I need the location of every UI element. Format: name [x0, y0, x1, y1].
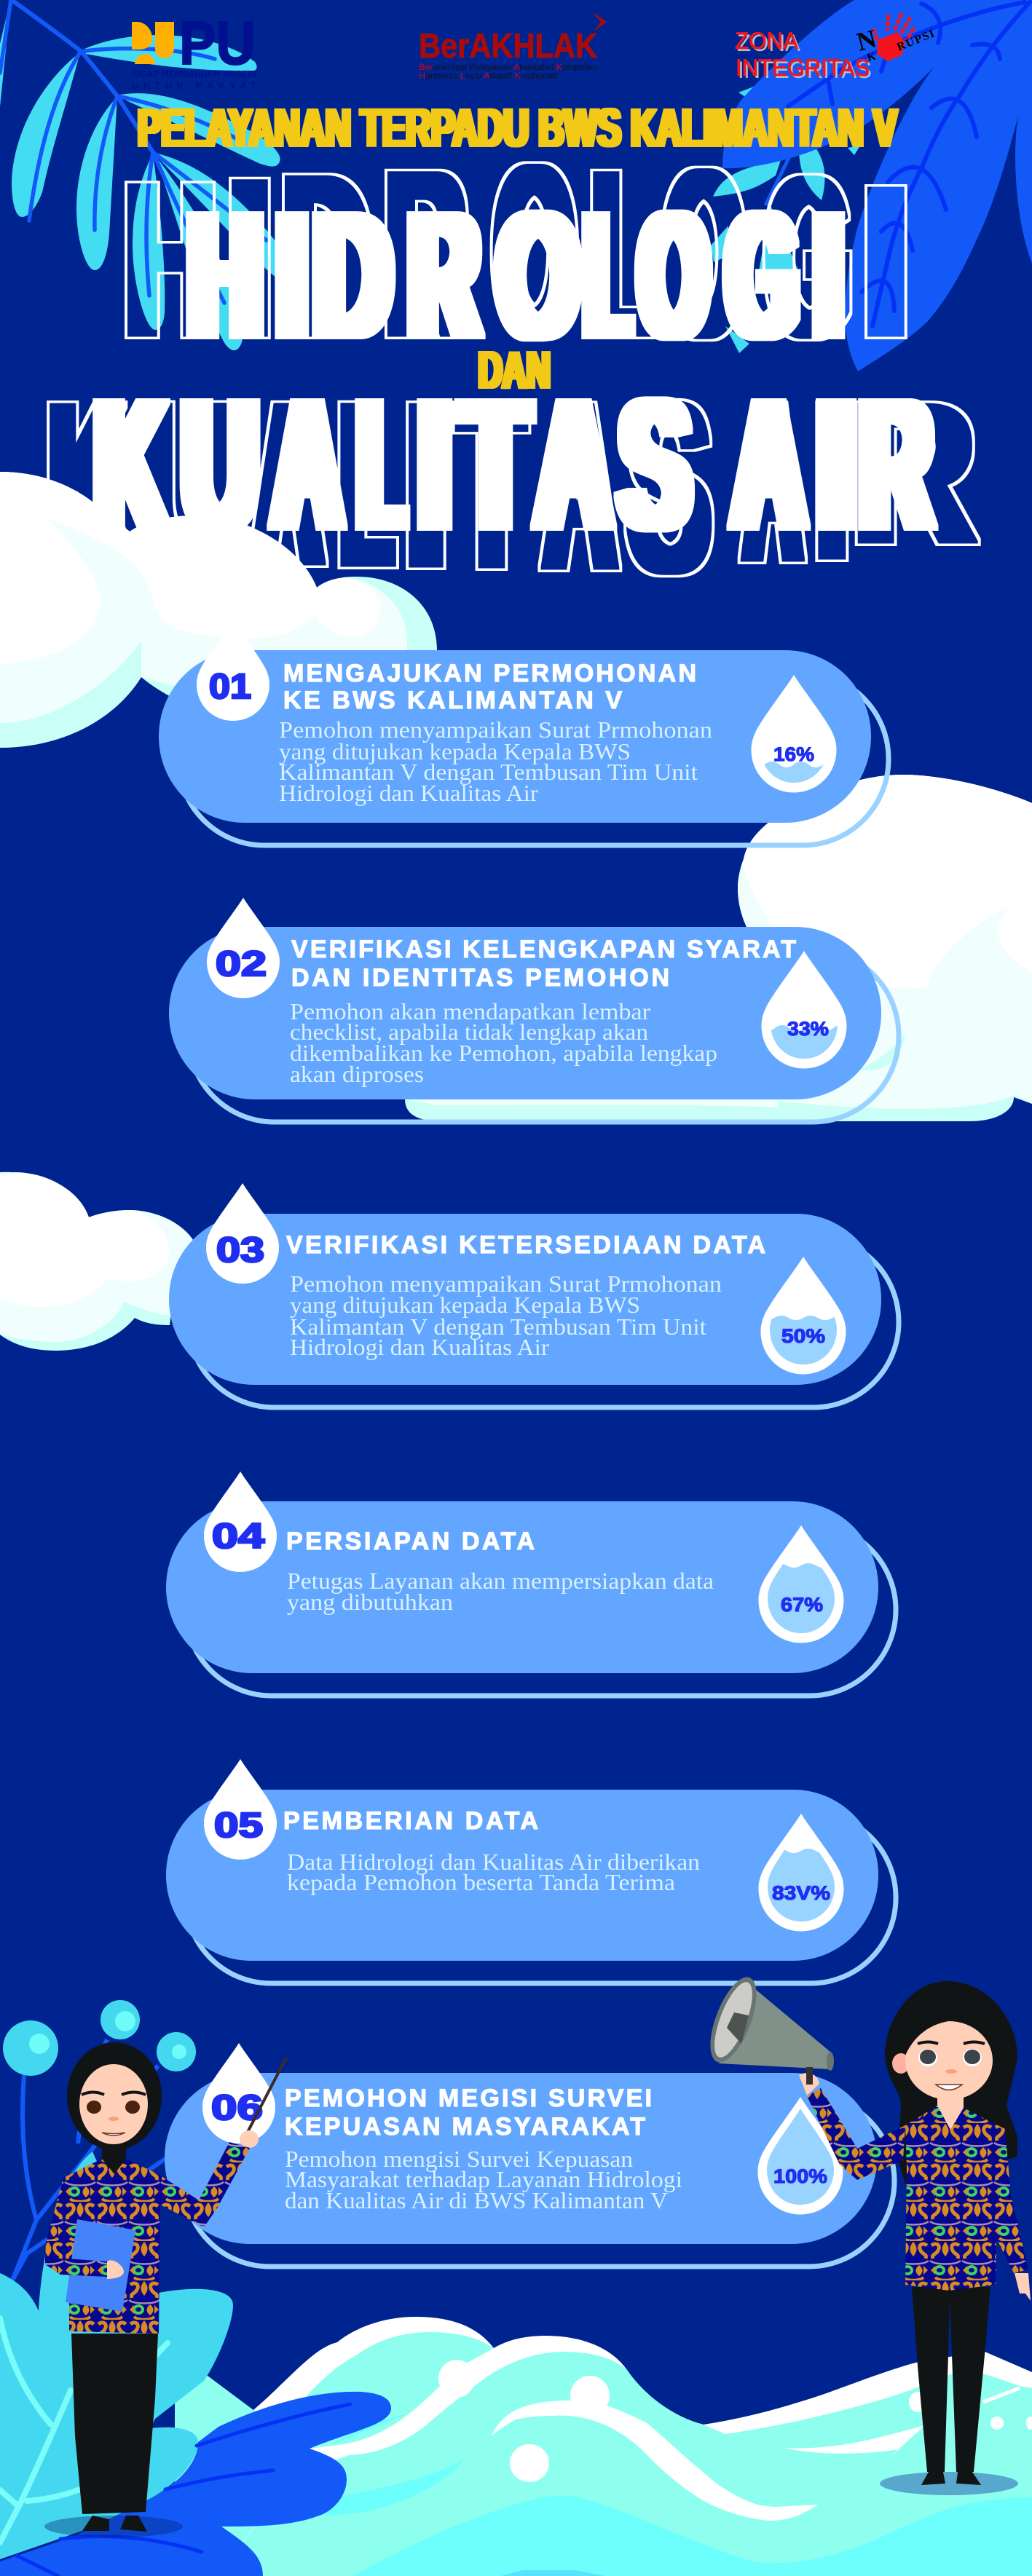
step 5 number drop	[204, 1759, 277, 1860]
title outline: HIDROLOGI	[125, 114, 910, 388]
panel: step 1	[159, 620, 889, 845]
step 1 description: Pemohon menyampaikan Surat Prmohonan	[279, 716, 712, 743]
step 3 number drop: 03	[216, 1231, 264, 1270]
title: KUALITAS AIR: A	[733, 361, 804, 567]
title: HIDROLOGI: I	[814, 176, 843, 375]
step 4 number drop	[204, 1471, 277, 1572]
step 4 description: Petugas Layanan akan mempersiapkan data	[287, 1568, 714, 1594]
title outline: KUALITAS AIR: L	[341, 353, 393, 616]
logo: Zona Integritas: ZONA	[737, 30, 801, 56]
step 1 number drop	[197, 620, 269, 721]
step 2 description: akan diproses	[290, 1061, 424, 1087]
step 4 percentage drop: 67%	[781, 1594, 823, 1616]
step 5 percentage drop	[759, 1814, 843, 1931]
title outline: KUALITAS AIR: A	[544, 353, 616, 620]
title outline: KUALITAS AIR: I	[403, 353, 448, 617]
title outline: HIDROLOGI: G	[767, 129, 851, 384]
step 1 percentage drop	[752, 675, 836, 792]
panel: step 4	[166, 1471, 896, 1696]
title outline: HIDROLOGI: H	[125, 138, 216, 383]
step 3 percentage drop	[760, 1257, 846, 1374]
step 6 heading: PEMOHON MEGISI SURVEI	[285, 2085, 652, 2112]
title: pelayanan terpadu: PELAYANAN TERPADU BWS KALIMANTAN V	[138, 98, 897, 159]
logo: No Korupsi hand: N	[854, 24, 879, 57]
logo: Zona Integritas: INTEGRITAS	[738, 57, 872, 83]
step 2 description: checklist, apabila tidak lengkap akan	[290, 1019, 648, 1045]
step 4 heading: PERSIAPAN DATA	[286, 1528, 535, 1555]
step 2 description	[290, 998, 717, 1087]
step 3 description: Hidrologi dan Kualitas Air	[290, 1334, 549, 1360]
step 1 percentage drop: 16%	[773, 743, 814, 765]
logo: Zona Integritas: ZONA	[735, 28, 799, 54]
cloud: right	[405, 775, 1032, 1121]
logo: PU: PU	[179, 9, 256, 77]
panel: step 6	[165, 2043, 894, 2267]
icon: megaphone	[701, 1972, 834, 2085]
step 2 number drop: 02	[216, 945, 267, 984]
logo: No Korupsi hand	[854, 13, 937, 64]
title: KUALITAS AIR: S	[620, 361, 690, 567]
cloud: middle left	[0, 1172, 193, 1351]
step 2 heading	[291, 936, 796, 992]
title outline: KUALITAS AIR: S	[629, 352, 711, 624]
logo: Zona Integritas: INTEGRITAS	[736, 55, 870, 81]
title outline: KUALITAS AIR: I	[816, 355, 848, 607]
leaves: bottom-left cyan	[0, 2152, 233, 2559]
step 6 percentage drop	[757, 2097, 843, 2214]
step 6 heading: KEPUASAN MASYARAKAT	[285, 2113, 645, 2141]
title outline: KUALITAS AIR: A	[253, 353, 323, 614]
figure: woman with hijab and pointer	[44, 2042, 286, 2537]
step 4 description: yang dibutuhkan	[287, 1589, 453, 1615]
logo: No Korupsi hand: K	[866, 50, 878, 64]
step 2 percentage drop: 33%	[787, 1018, 829, 1040]
step 5 number drop: 05	[214, 1806, 263, 1845]
step 4 description	[287, 1568, 714, 1615]
title: HIDROLOGI: O	[498, 176, 578, 375]
step 6 number drop	[202, 2043, 275, 2144]
leaves: bottom-left blue	[0, 2392, 391, 2576]
title outline: HIDROLOGI: I	[226, 132, 273, 384]
title: HIDROLOGI: G	[728, 175, 797, 374]
title: HIDROLOGI	[189, 175, 843, 375]
leaves: top-left branch	[0, 0, 285, 350]
leaves: top-right	[711, 0, 1032, 371]
step 6 description: Pemohon mengisi Survei Kepuasan	[285, 2146, 633, 2172]
logo: BerAKHLAK	[419, 12, 607, 81]
title outline: HIDROLOGI: R	[386, 120, 466, 386]
logo: BerAKHLAK: Berorientasi Pelayanan Akuntabel Kompeten	[419, 62, 597, 72]
title: KUALITAS AIR: A	[274, 363, 341, 567]
title outline: HIDROLOGI: I	[862, 142, 910, 382]
title: HIDROLOGI: H	[189, 176, 261, 375]
title: HIDROLOGI: R	[409, 176, 478, 374]
title outline: KUALITAS AIR: A	[744, 356, 801, 609]
step 6 number drop: 06	[211, 2089, 263, 2127]
title outline: KUALITAS AIR: K	[49, 362, 122, 585]
figure: woman with megaphone	[701, 1972, 1031, 2495]
step 2 heading: DAN IDENTITAS PEMOHON	[291, 964, 669, 992]
logo: Zona Integritas	[735, 28, 872, 83]
logo: PU: UNTUK RAKYAT	[132, 80, 256, 91]
cloud: top left	[0, 472, 437, 748]
step 6 description: Masyarakat terhadap Layanan Hidrologi	[285, 2166, 682, 2192]
title: KUALITAS AIR	[96, 361, 931, 568]
step 2 description: Pemohon akan mendapatkan lembar	[290, 998, 650, 1024]
title: KUALITAS AIR: R	[861, 361, 931, 567]
title outline: HIDROLOGI: O	[495, 114, 575, 388]
title: KUALITAS AIR: I	[815, 363, 857, 567]
logo: No Korupsi hand: RUPSI	[895, 28, 937, 54]
title outline: HIDROLOGI: D	[283, 126, 370, 385]
step 2 description: dikembalikan ke Pemohon, apabila lengkap	[290, 1040, 717, 1066]
step 1 heading: MENGAJUKAN PERMOHONAN	[283, 660, 696, 687]
step 3 heading: VERIFIKASI KETERSEDIAAN DATA	[286, 1231, 765, 1259]
logo: PU: SIGAP MEMBANGUN NEGERI	[132, 68, 256, 79]
step 3 percentage drop: 50%	[781, 1325, 825, 1347]
panel: step 5	[166, 1759, 896, 1983]
step 5 description	[287, 1849, 700, 1895]
step 1 heading	[283, 660, 696, 714]
plant stems with circles: bottom left	[3, 2000, 196, 2280]
title: KUALITAS AIR: K	[96, 361, 164, 567]
step 5 percentage drop: 83V%	[772, 1882, 830, 1904]
step 1 description	[279, 716, 712, 806]
step 4 number drop: 04	[212, 1517, 264, 1556]
step 3 description: yang ditujukan kepada Kepala BWS	[290, 1292, 640, 1318]
title: DAN: DAN	[478, 340, 551, 400]
title: KUALITAS AIR: L	[360, 361, 403, 567]
title: KUALITAS AIR: T	[462, 362, 529, 568]
title: KUALITAS AIR: I	[419, 361, 451, 567]
step 5 heading: PEMBERIAN DATA	[283, 1807, 538, 1835]
step 1 description: yang ditujukan kepada Kepala BWS	[279, 738, 631, 764]
step 1 number drop: 01	[209, 668, 251, 706]
step 4 percentage drop	[759, 1525, 843, 1643]
step 6 description: dan Kualitas Air di BWS Kalimantan V	[285, 2187, 668, 2213]
step 3 description: Pemohon menyampaikan Surat Prmohonan	[290, 1271, 722, 1297]
logo: BerAKHLAK: BerAKHLAK	[419, 26, 597, 65]
title: HIDROLOGI: I	[277, 175, 307, 374]
step 5 description: Data Hidrologi dan Kualitas Air diberikan	[287, 1849, 700, 1875]
title outline: KUALITAS AIR: R	[852, 361, 976, 585]
step 6 heading	[285, 2085, 652, 2141]
title outline: HIDROLOGI: O	[664, 121, 744, 387]
panel: step 3	[169, 1183, 899, 1407]
logo: BerAKHLAK: Harmonis Loyal Adaptif Kolaboratif	[419, 71, 559, 81]
step 3 description	[290, 1271, 722, 1360]
step 6 description	[285, 2146, 682, 2213]
water waves: bottom	[175, 2317, 1032, 2576]
title: KUALITAS AIR: U	[183, 362, 257, 567]
panel: step 2	[169, 898, 899, 1122]
title outline: KUALITAS AIR	[49, 352, 976, 624]
title outline: HIDROLOGI: L	[592, 122, 654, 387]
step 2 heading: VERIFIKASI KELENGKAPAN SYARAT	[291, 936, 796, 963]
step 6 percentage drop: 100%	[773, 2165, 827, 2187]
title: HIDROLOGI: D	[314, 175, 391, 374]
title: HIDROLOGI: O	[640, 175, 707, 374]
title outline: KUALITAS AIR: T	[460, 353, 524, 618]
step 1 heading: KE BWS KALIMANTAN V	[283, 687, 622, 714]
step 3 description: Kalimantan V dengan Tembusan Tim Unit	[290, 1313, 706, 1340]
step 2 number drop	[207, 898, 280, 998]
step 1 description: Kalimantan V dengan Tembusan Tim Unit	[279, 759, 698, 785]
step 3 number drop	[206, 1183, 279, 1284]
logo: PU	[132, 9, 256, 91]
title outline: KUALITAS AIR: U	[137, 354, 242, 609]
step 2 percentage drop	[762, 951, 846, 1068]
title: HIDROLOGI: L	[586, 176, 629, 375]
step 1 description: Hidrologi dan Kualitas Air	[279, 780, 538, 806]
step 5 description: kepada Pemohon beserta Tanda Terima	[287, 1869, 675, 1895]
title: KUALITAS AIR: A	[537, 362, 610, 567]
